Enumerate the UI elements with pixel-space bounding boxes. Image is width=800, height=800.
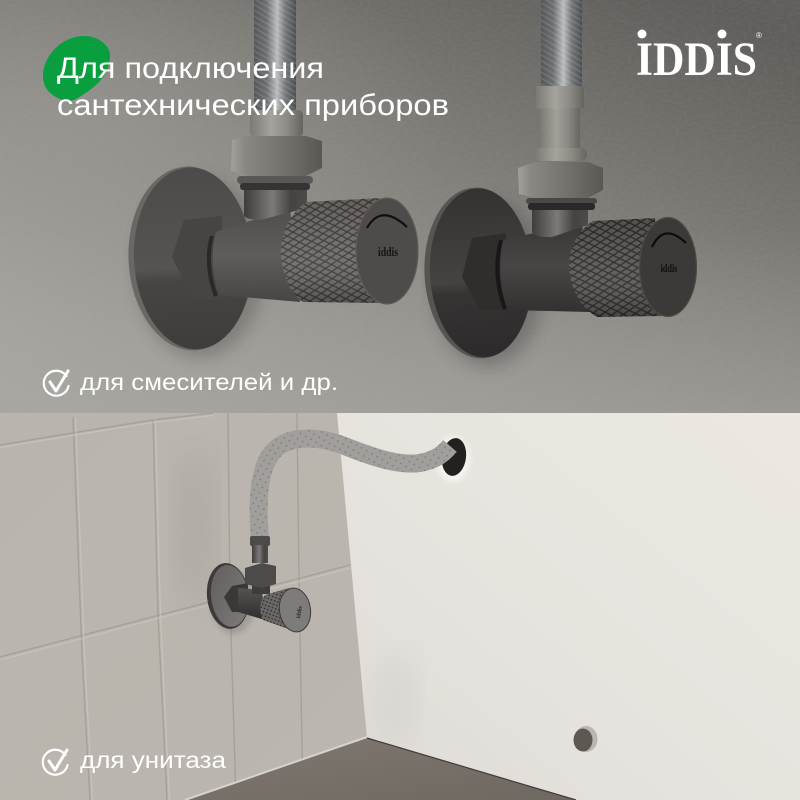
vertical stem right bbox=[532, 208, 588, 237]
floor pin bbox=[574, 726, 598, 752]
small fitting bbox=[252, 545, 268, 563]
logo: IDDIS: ® bbox=[756, 31, 762, 40]
caption: for toilet bbox=[43, 747, 226, 775]
flexible hose left bbox=[254, 0, 296, 112]
hex base left bbox=[172, 216, 222, 300]
hex nut left bbox=[231, 136, 322, 176]
lower collar right bbox=[535, 148, 587, 161]
title line 2: сантехнических приборов bbox=[57, 89, 449, 122]
caption text: для унитаза bbox=[80, 747, 226, 773]
caption text: для смесителей и др. bbox=[80, 369, 338, 395]
small hose collar bbox=[250, 536, 270, 546]
cap arc mark right bbox=[652, 233, 686, 247]
hex base right bbox=[462, 233, 506, 310]
shadow on white panel bbox=[370, 650, 420, 750]
cap brand right: iddis bbox=[660, 261, 678, 275]
thread ring left bbox=[237, 176, 313, 190]
wall hole with hose entry bbox=[436, 436, 470, 482]
logo: IDDIS: IDDIS bbox=[636, 33, 757, 86]
small cap brand: iddis bbox=[296, 605, 304, 619]
icon: check circle bbox=[43, 750, 68, 775]
vertical stem left bbox=[244, 186, 307, 220]
title with green blob bbox=[43, 36, 449, 122]
knob cap left bbox=[356, 198, 418, 304]
knob cap right bbox=[640, 218, 696, 316]
cap brand left: iddis bbox=[378, 244, 398, 259]
small hex base bbox=[224, 583, 248, 612]
middle fitting right bbox=[540, 108, 580, 149]
floor bbox=[185, 737, 576, 800]
knurled knob left bbox=[281, 198, 384, 303]
hose collar left bbox=[250, 110, 303, 137]
panel: top photo, concrete wall with two valves bbox=[0, 0, 800, 414]
small body bbox=[238, 588, 265, 620]
concrete wall background bbox=[0, 0, 800, 414]
valve: left angle valve bbox=[124, 0, 418, 358]
white wall panel bbox=[337, 413, 800, 800]
thread ring right bbox=[526, 198, 597, 210]
small knurled knob bbox=[260, 588, 294, 631]
valve: small wall valve bbox=[204, 536, 313, 634]
valve: right angle valve bbox=[420, 0, 696, 367]
small hex nut bbox=[245, 563, 276, 588]
caption: for mixers bbox=[44, 369, 338, 396]
knurled knob right bbox=[569, 218, 664, 317]
hose collar right bbox=[536, 86, 584, 109]
icon: check circle bbox=[44, 371, 68, 396]
small flange bbox=[204, 561, 252, 631]
panel: bottom photo, tiled wall and white panel bbox=[0, 413, 800, 800]
title line 1: Для подключения bbox=[57, 52, 324, 85]
gray flexible hose bbox=[259, 439, 450, 540]
flexible hose right bbox=[541, 0, 582, 88]
wall flange right bbox=[420, 185, 537, 361]
valve body right bbox=[497, 222, 590, 312]
valve body left bbox=[209, 208, 300, 302]
hex nut right bbox=[518, 162, 603, 198]
green blob bbox=[43, 36, 110, 101]
small stem bbox=[252, 582, 270, 594]
tile wall bbox=[0, 413, 400, 800]
cap arc mark left bbox=[367, 215, 407, 228]
wall flange left bbox=[124, 163, 257, 354]
